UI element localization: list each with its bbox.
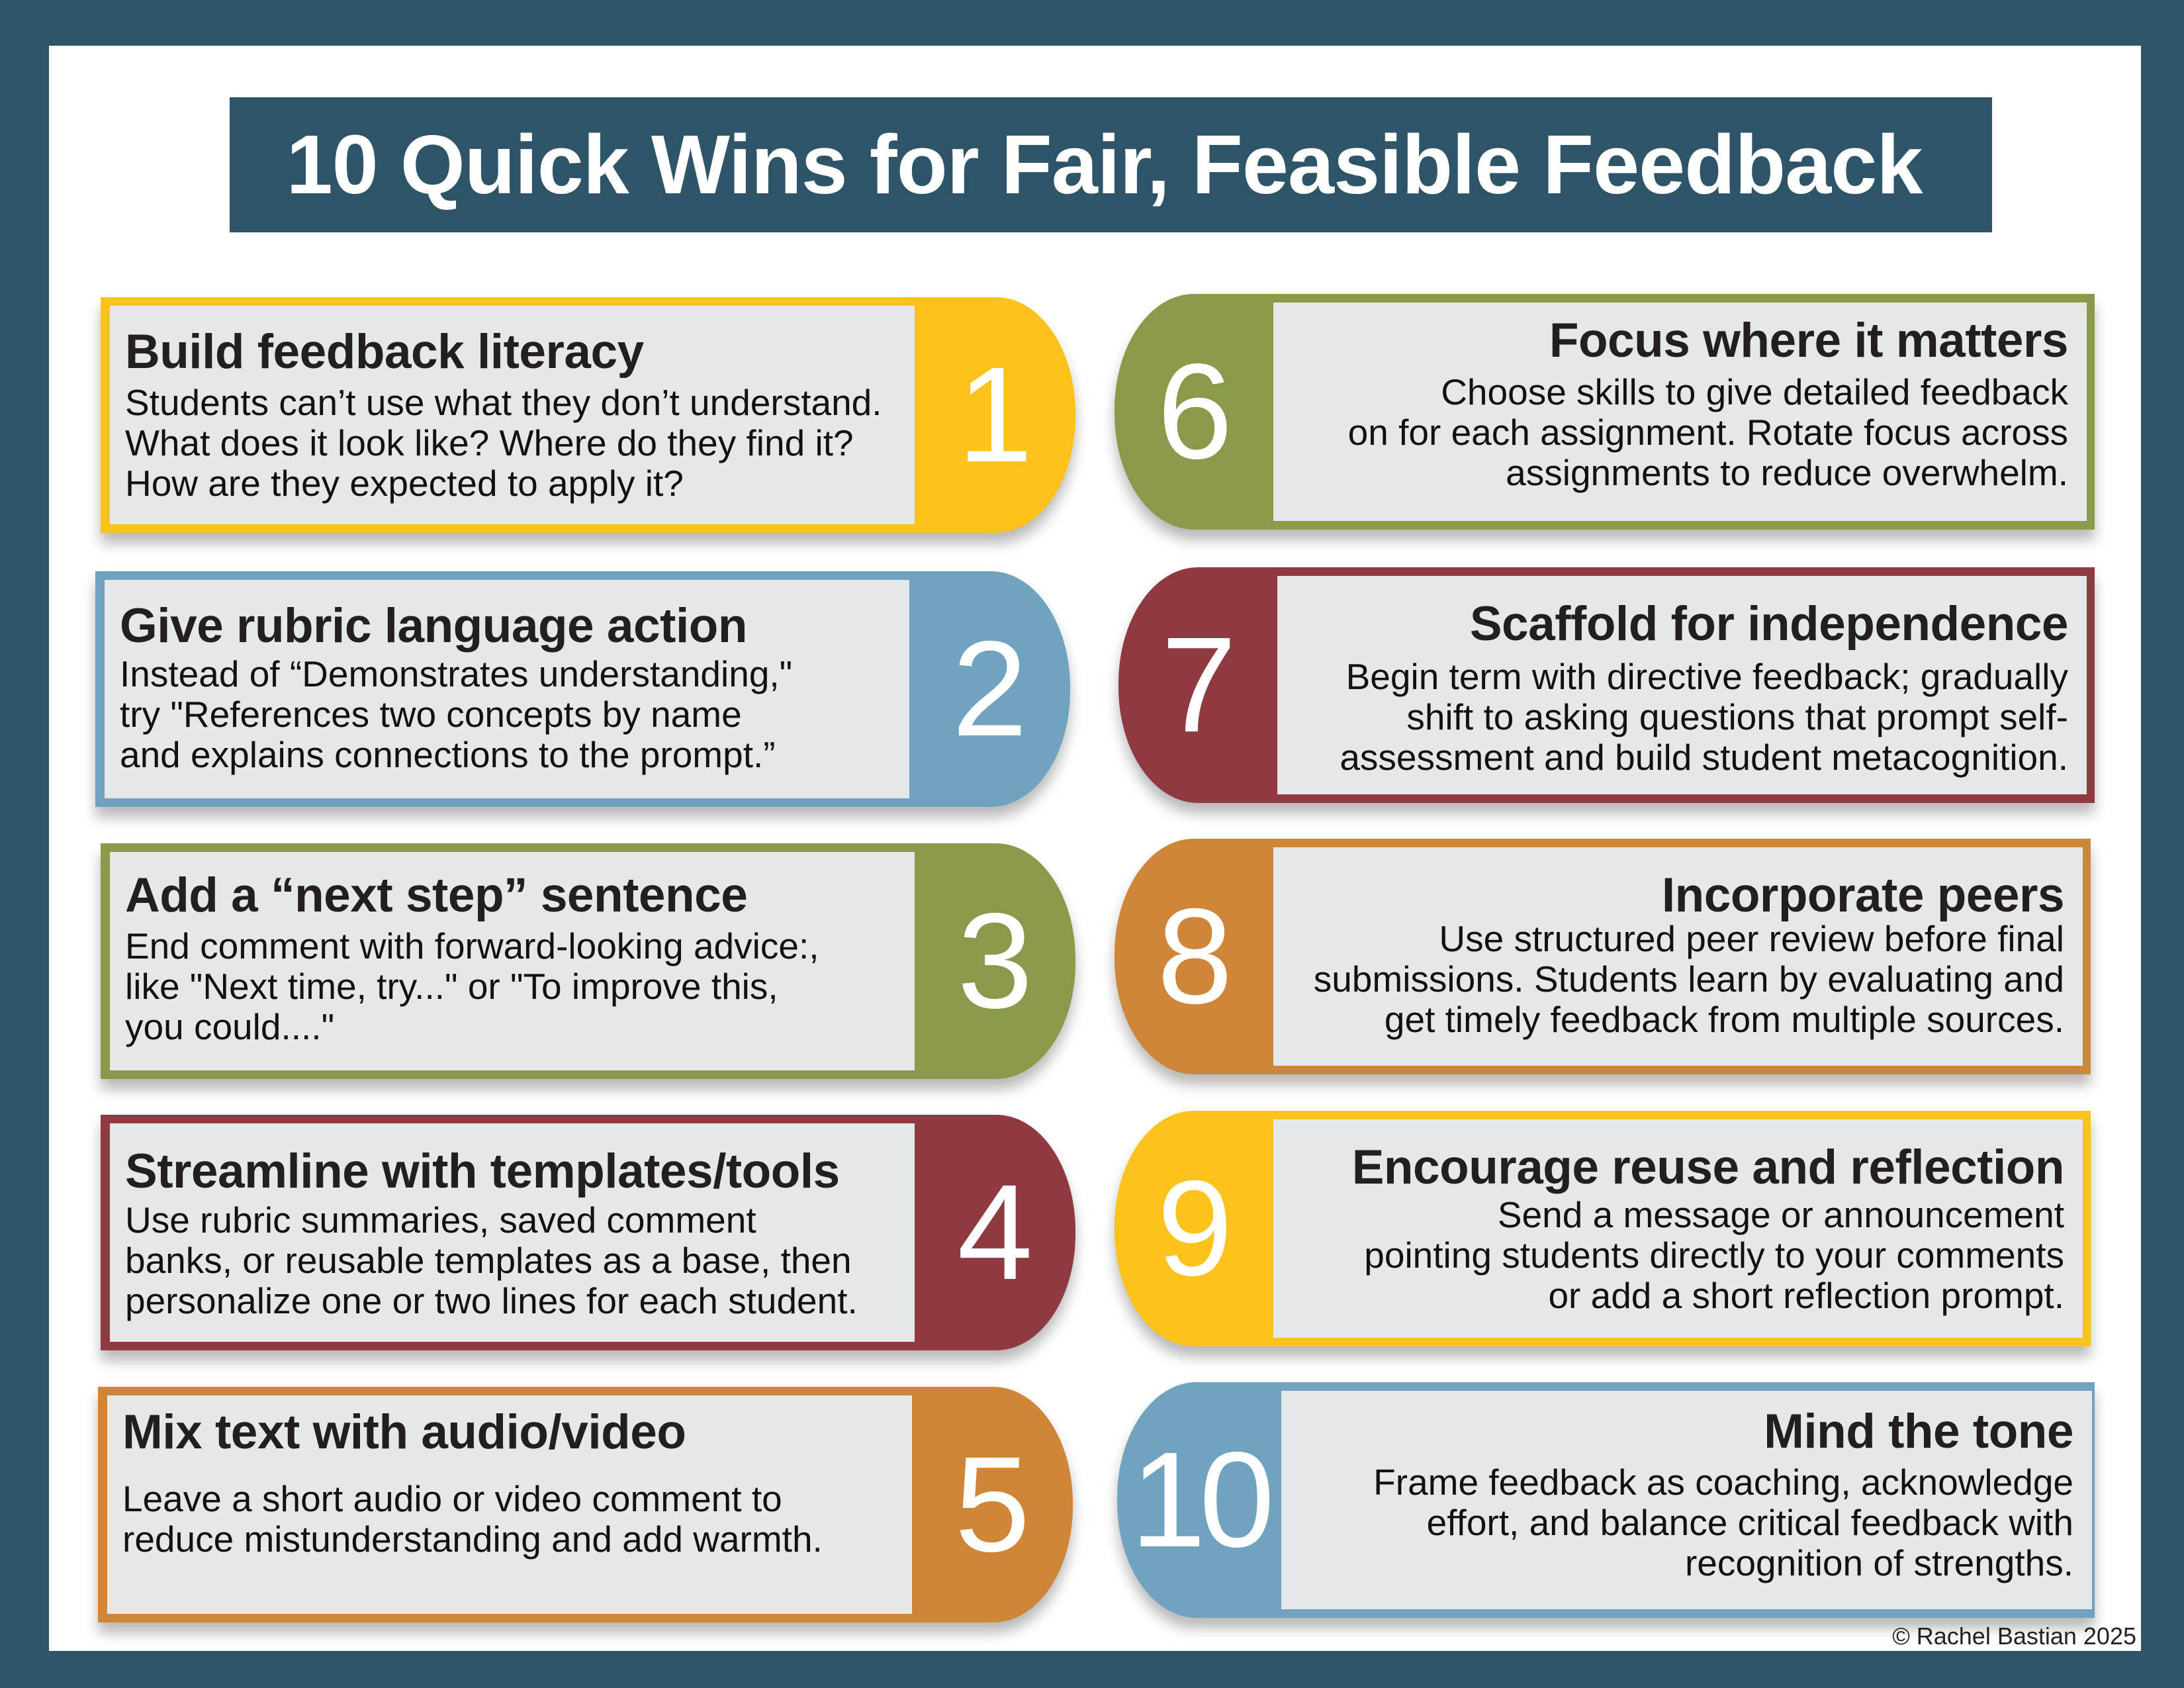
card 7 (1118, 567, 2095, 803)
heading 2: Give rubric language action (120, 599, 747, 653)
body 5: Leave a short audio or video comment to (122, 1478, 782, 1519)
body 8: submissions. Students learn by evaluating and (1314, 959, 2064, 1000)
card 2 (95, 571, 1070, 807)
body 8: Use structured peer review before final (1439, 918, 2064, 959)
heading 3: Add a “next step” sentence (125, 868, 747, 922)
heading 9: Encourage reuse and reflection (1352, 1141, 2064, 1194)
card 4 (101, 1115, 1075, 1350)
body 9: Send a message or announcement (1498, 1194, 2064, 1235)
heading 8: Incorporate peers (1662, 868, 2064, 922)
body 10: effort, and balance critical feedback with (1427, 1502, 2073, 1543)
card 1 (101, 297, 1075, 533)
body 7: assessment and build student metacognition. (1340, 737, 2068, 778)
body 5 (122, 1478, 823, 1560)
card 3 (101, 843, 1075, 1079)
body 2 (120, 653, 792, 775)
heading 7: Scaffold for independence (1470, 597, 2068, 651)
heading 10: Mind the tone (1764, 1405, 2073, 1458)
body 2: try "References two concepts by name (120, 694, 742, 735)
body 7: shift to asking questions that prompt self- (1406, 696, 2068, 737)
card 9 (1115, 1111, 2091, 1346)
body 10: Frame feedback as coaching, acknowledge (1373, 1462, 2073, 1503)
body 3: like "Next time, try..." or "To improve this, (125, 966, 778, 1007)
body 4: Use rubric summaries, saved comment (125, 1199, 756, 1241)
number 9: 9 (1157, 1152, 1232, 1304)
heading 1: Build feedback literacy (125, 325, 644, 379)
body 1: What does it look like? Where do they find it? (125, 422, 854, 463)
body 6: Choose skills to give detailed feedback (1441, 371, 2068, 412)
body 5: reduce mistunderstanding and add warmth. (122, 1519, 823, 1560)
body 8 (1314, 918, 2064, 1040)
title bar: 10 Quick Wins for Fair, Feasible Feedback (287, 118, 1922, 211)
body 8: get timely feedback from multiple sources. (1385, 999, 2064, 1040)
number 7: 7 (1161, 609, 1236, 761)
body 3 (125, 925, 819, 1047)
body 6: assignments to reduce overwhelm. (1506, 452, 2068, 493)
body 1: How are they expected to apply it? (125, 463, 684, 504)
body 3: End comment with forward-looking advice:, (125, 925, 819, 966)
number 10: 10 (1130, 1424, 1268, 1575)
number 8: 8 (1157, 880, 1232, 1032)
heading 6: Focus where it matters (1549, 314, 2068, 367)
body 4: banks, or reusable templates as a base, then (125, 1240, 852, 1281)
body 6: on for each assignment. Rotate focus across (1348, 412, 2068, 453)
copyright: © Rachel Bastian 2025 (1892, 1622, 2136, 1650)
body 4: personalize one or two lines for each student. (125, 1280, 858, 1321)
body 9: or add a short reflection prompt. (1548, 1275, 2064, 1316)
number 3: 3 (957, 885, 1032, 1037)
body 10: recognition of strengths. (1685, 1542, 2073, 1583)
body 3: you could...." (125, 1006, 334, 1047)
body 10 (1373, 1462, 2073, 1583)
number 4: 4 (957, 1156, 1032, 1308)
heading 5: Mix text with audio/video (122, 1405, 686, 1459)
number 2: 2 (952, 613, 1027, 765)
card 6 (1115, 294, 2095, 530)
body 2: and explains connections to the prompt.” (120, 734, 776, 775)
body 7: Begin term with directive feedback; gradually (1346, 656, 2068, 697)
body 9: pointing students directly to your comments (1364, 1235, 2064, 1276)
body 9 (1364, 1194, 2064, 1316)
card 5 (98, 1387, 1073, 1622)
card 8 (1115, 839, 2091, 1074)
body 2: Instead of “Demonstrates understanding," (120, 653, 792, 694)
number 5: 5 (954, 1429, 1030, 1580)
number 6: 6 (1157, 336, 1232, 487)
title bar (230, 97, 1992, 232)
heading 4: Streamline with templates/tools (125, 1145, 840, 1198)
body 1: Students can’t use what they don’t understand. (125, 382, 882, 423)
body 4 (125, 1199, 858, 1321)
card 10 (1117, 1382, 2095, 1618)
body 7 (1340, 656, 2068, 778)
body 6 (1348, 371, 2068, 493)
number 1: 1 (957, 339, 1032, 491)
body 1 (125, 382, 882, 504)
